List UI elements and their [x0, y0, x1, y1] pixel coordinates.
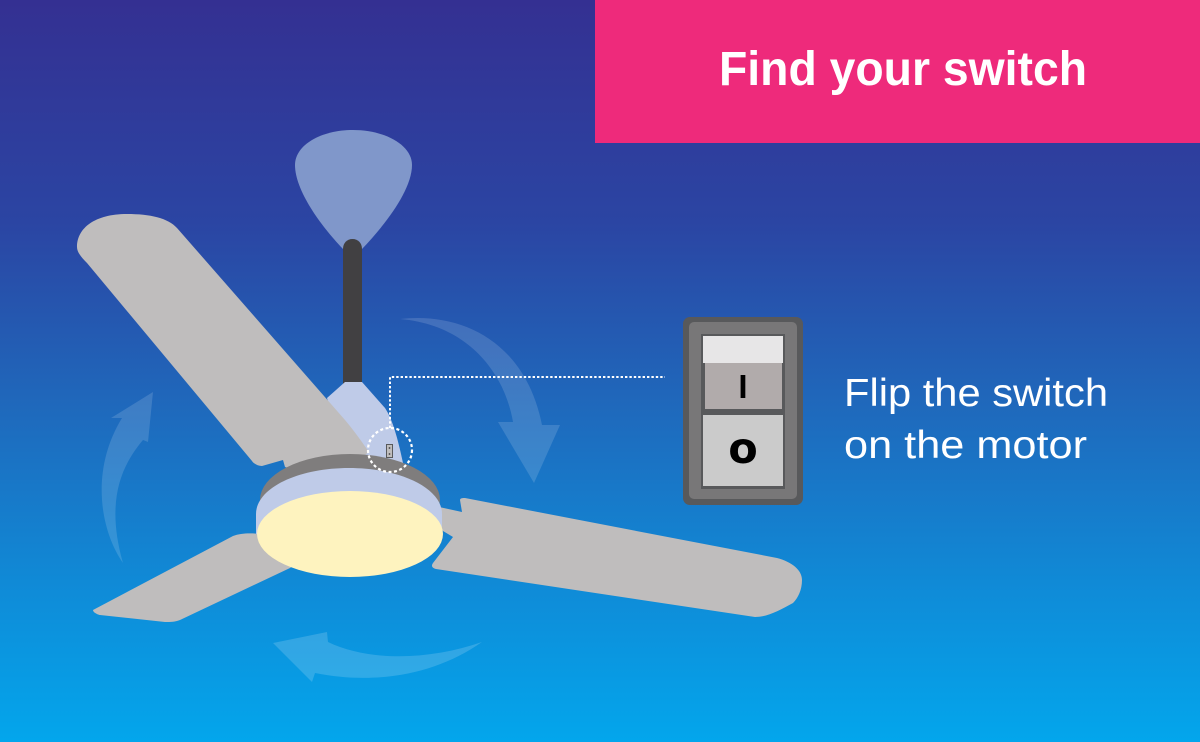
arrow: rotation left	[102, 392, 153, 563]
callout: dotted circle	[368, 428, 412, 472]
lamp	[257, 491, 443, 577]
fan canopy	[295, 130, 412, 249]
motor grey band	[260, 454, 440, 546]
blade: top left	[77, 214, 369, 480]
mini switch	[386, 444, 392, 458]
arrow: rotation bottom	[273, 632, 482, 682]
blade: bottom left	[93, 533, 300, 622]
instruction text: Flip the switch	[844, 372, 1108, 415]
motor stem	[327, 382, 403, 470]
callout: dotted leader line	[390, 377, 665, 428]
blade: right	[430, 498, 802, 617]
motor ring	[256, 468, 442, 534]
title: Find your switch	[719, 43, 1087, 96]
rocker switch	[683, 317, 803, 505]
downrod	[343, 239, 362, 384]
arrow: rotation right	[400, 318, 560, 483]
instruction text: on the motor	[844, 424, 1087, 467]
instruction text	[844, 372, 1108, 467]
ceiling fan	[77, 130, 802, 622]
switch off mark: o	[728, 424, 758, 474]
switch on mark: I	[738, 368, 748, 405]
title banner	[595, 0, 1200, 143]
